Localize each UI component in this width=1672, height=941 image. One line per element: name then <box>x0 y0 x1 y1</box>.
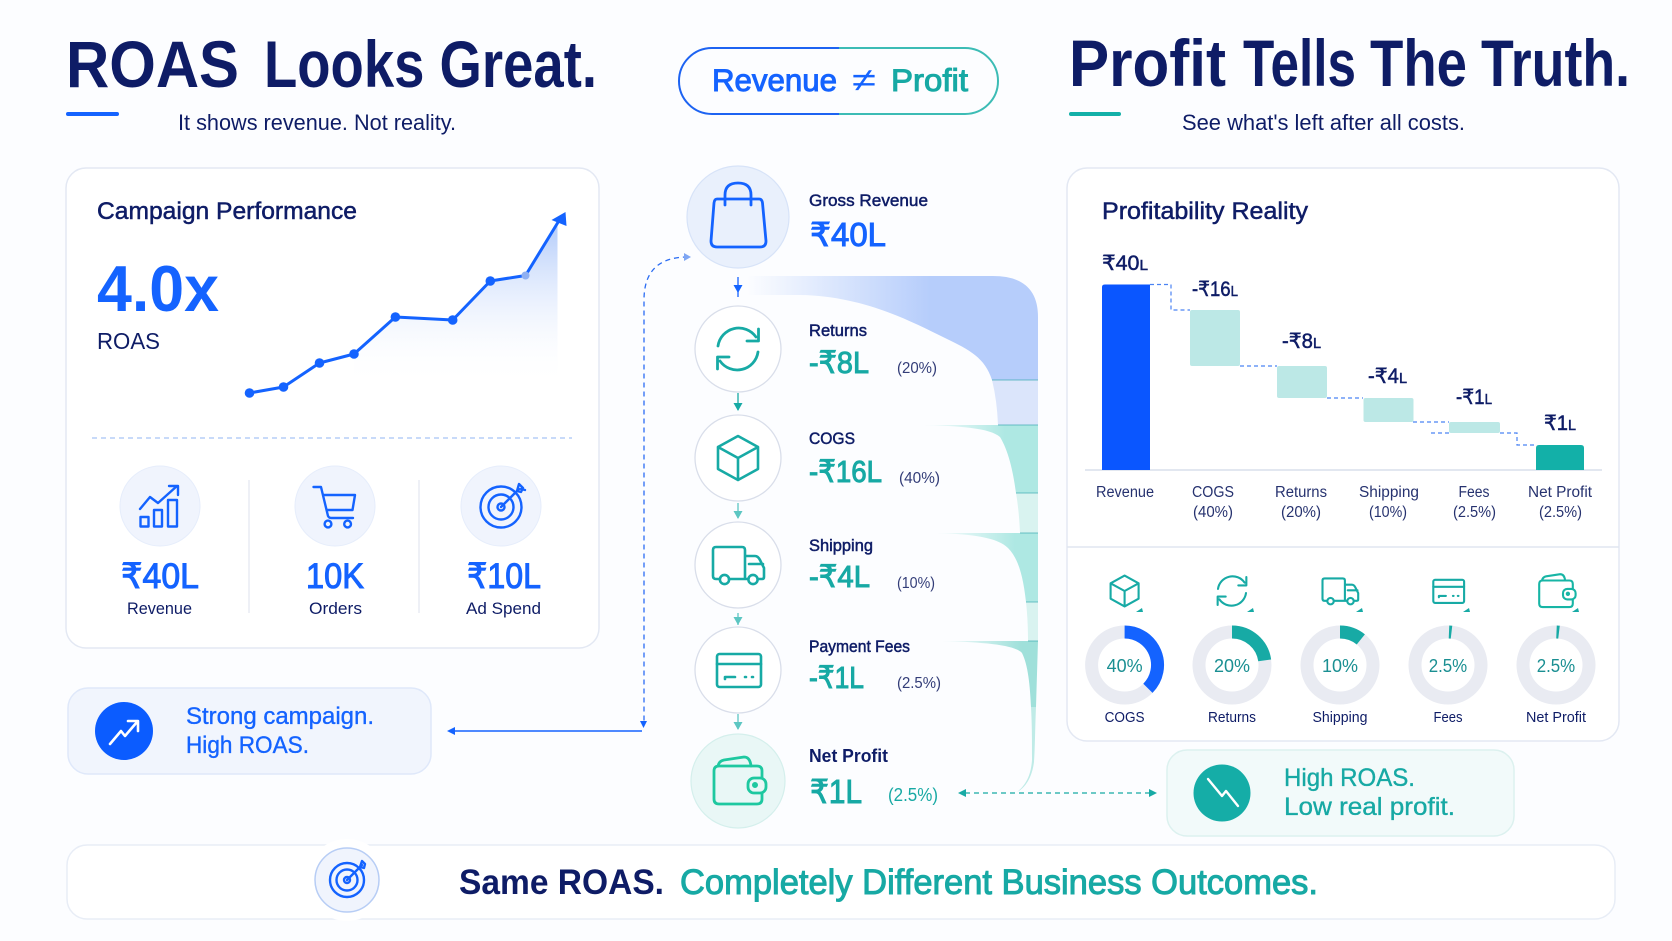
donut: returns 20% <box>1199 576 1265 726</box>
stat: ad spend <box>461 466 541 618</box>
stat: orders: 10K <box>306 557 364 596</box>
callout: strong campaign: Strong campaign. <box>186 703 374 730</box>
banner: same ROAS takeaway <box>67 839 1615 921</box>
step: gross revenue: ₹40L <box>810 216 886 253</box>
bar: shipping <box>1364 365 1414 422</box>
stat: ad spend: ₹10L <box>467 557 541 596</box>
axis labels: Fees <box>1458 484 1490 501</box>
icon: target badge <box>306 839 388 921</box>
axis labels: COGS <box>1192 484 1234 501</box>
bar: fees <box>1449 386 1500 433</box>
bar: fees: -₹1L <box>1456 386 1492 409</box>
icon: box <box>718 436 758 480</box>
icon: truck <box>713 547 764 584</box>
stat: orders <box>295 466 375 618</box>
step: shipping: (10%) <box>897 575 935 592</box>
icon: wallet <box>714 757 766 804</box>
bar: COGS: -₹16L <box>1192 278 1238 301</box>
bar: revenue: ₹40L <box>1102 252 1148 275</box>
donut: shipping 10%: Shipping <box>1312 709 1368 726</box>
donut: net profit 2.5% <box>1523 574 1589 726</box>
panel: campaign performance <box>66 168 599 648</box>
axis labels: (20%) <box>1281 504 1321 521</box>
step: shipping <box>695 522 935 608</box>
step: shipping: Shipping <box>809 536 873 555</box>
panel heading: Profitability Reality <box>1102 198 1308 225</box>
icon: shopping bag <box>711 183 766 247</box>
stat: revenue: Revenue <box>127 599 192 618</box>
axis labels: (40%) <box>1193 504 1233 521</box>
blue underline <box>66 112 119 116</box>
donut: COGS 40% <box>1092 576 1158 726</box>
title: Profit Tells The Truth: Profit <box>1069 26 1226 100</box>
callout: low real profit: Low real profit. <box>1284 793 1455 821</box>
bar: net profit: ₹1L <box>1544 412 1576 435</box>
axis labels: Returns <box>1275 484 1327 501</box>
right header <box>1069 26 1630 135</box>
donut: shipping 10%: 10% <box>1322 656 1358 676</box>
callout: low real profit: High ROAS. <box>1284 764 1415 792</box>
arrow: net profit to low real profit callout <box>958 789 1157 797</box>
step: payment fees: -₹1L <box>809 660 864 695</box>
axis labels: Net Profit <box>1528 484 1593 501</box>
pill: Revenue not equal Profit: Profit <box>891 62 968 98</box>
step: payment fees: (2.5%) <box>897 675 941 692</box>
step: returns: -₹8L <box>809 345 869 380</box>
title: Profit Tells The Truth: The <box>1370 26 1467 100</box>
bar: shipping: -₹4L <box>1368 365 1407 388</box>
donut: shipping 10% <box>1307 578 1373 726</box>
banner: same ROAS takeaway: Completely Different Business Outcomes. <box>680 863 1318 902</box>
donut: returns 20%: Returns <box>1208 709 1256 726</box>
step: returns: Returns <box>809 321 867 340</box>
title: Profit Tells The Truth: Tells <box>1243 26 1356 100</box>
donut: returns 20%: 20% <box>1214 656 1250 676</box>
banner: same ROAS takeaway: Same ROAS. <box>459 863 664 902</box>
axis labels: (10%) <box>1369 504 1407 521</box>
waterfall chart <box>1085 252 1602 521</box>
icon: bar chart <box>140 486 178 526</box>
axis labels: Revenue <box>1096 484 1154 501</box>
stat: orders: Orders <box>309 599 362 618</box>
arrow: shipping to fees <box>734 613 742 625</box>
donut: fees 2.5%: Fees <box>1434 709 1462 726</box>
step: COGS: (40%) <box>899 470 940 487</box>
donut: fees 2.5% <box>1415 580 1481 726</box>
callout: strong campaign: High ROAS. <box>186 732 309 759</box>
sankey: revenue flow ribbon <box>747 276 1038 792</box>
donut: net profit 2.5%: 2.5% <box>1537 656 1575 676</box>
step: net profit <box>691 734 938 828</box>
step: returns <box>695 306 937 392</box>
subtitle: costs: See what's left after all costs. <box>1182 110 1465 135</box>
icon: cart <box>314 487 355 527</box>
axis labels: (2.5%) <box>1453 504 1496 521</box>
axis labels: (2.5%) <box>1539 504 1582 521</box>
axis labels: Shipping <box>1359 484 1419 501</box>
icon: target <box>480 484 525 528</box>
arrow: COGS to shipping <box>734 503 742 519</box>
step: shipping: -₹4L <box>809 559 870 594</box>
stat: revenue: ₹40L <box>121 557 199 596</box>
icon: card <box>717 654 761 687</box>
step: payment fees: Payment Fees <box>809 637 910 656</box>
donut: COGS 40%: COGS <box>1105 709 1145 726</box>
arrow: revenue to returns <box>734 277 742 297</box>
donut: net profit 2.5%: Net Profit <box>1526 709 1587 726</box>
line chart: rising ROAS <box>245 212 566 398</box>
pill: Revenue not equal Profit: ≠ <box>852 61 876 98</box>
step: gross revenue: Gross Revenue <box>809 191 928 210</box>
donut: COGS 40%: 40% <box>1107 656 1143 676</box>
step: payment fees <box>695 627 941 713</box>
step: COGS: -₹16L <box>809 454 882 489</box>
title: Profit Tells The Truth: Truth. <box>1481 26 1630 100</box>
title: ROAS Looks Great: ROAS <box>66 27 239 101</box>
subtitle: revenue: It shows revenue. Not reality. <box>178 110 456 135</box>
teal underline <box>1069 112 1121 116</box>
pill: Revenue not equal Profit: Revenue <box>712 62 837 98</box>
icon: refresh arrows <box>718 328 758 370</box>
metric: 4.0x ROAS: ROAS <box>97 328 160 354</box>
pill: Revenue not equal Profit <box>679 48 998 114</box>
callout: strong campaign <box>68 688 431 774</box>
icon: trending up <box>95 702 153 760</box>
stat: ad spend: Ad Spend <box>466 599 541 618</box>
callout: low real profit <box>1167 750 1514 836</box>
arrow: returns to COGS <box>734 393 742 411</box>
step: net profit: (2.5%) <box>888 785 938 805</box>
bar: net profit <box>1536 412 1584 470</box>
stat: revenue <box>120 466 200 618</box>
step: returns: (20%) <box>897 360 937 377</box>
title: ROAS Looks Great <box>66 27 597 101</box>
step: COGS: COGS <box>809 429 855 448</box>
metric: 4.0x ROAS <box>97 252 219 354</box>
panel heading: Campaign Performance <box>97 198 357 225</box>
title: ROAS Looks Great: Looks Great. <box>264 27 597 101</box>
title: Profit Tells The Truth <box>1069 26 1630 100</box>
bar: COGS <box>1190 278 1240 366</box>
step: net profit: Net Profit <box>809 746 888 766</box>
step: net profit: ₹1L <box>810 773 862 810</box>
panel: profitability reality <box>1067 168 1619 741</box>
step: COGS <box>695 415 940 501</box>
donut: fees 2.5%: 2.5% <box>1429 656 1467 676</box>
arrow: from revenue back to strong campaign callout <box>447 253 691 735</box>
bar: revenue <box>1102 252 1150 470</box>
step: gross revenue <box>687 166 928 268</box>
bar: returns: -₹8L <box>1282 330 1321 353</box>
arrow: fees to net profit <box>734 714 742 730</box>
bar: returns <box>1277 330 1327 398</box>
icon: trending down <box>1194 764 1250 822</box>
metric: 4.0x ROAS: 4.0x <box>97 252 219 325</box>
left header <box>66 27 597 135</box>
axis labels <box>1096 484 1593 521</box>
